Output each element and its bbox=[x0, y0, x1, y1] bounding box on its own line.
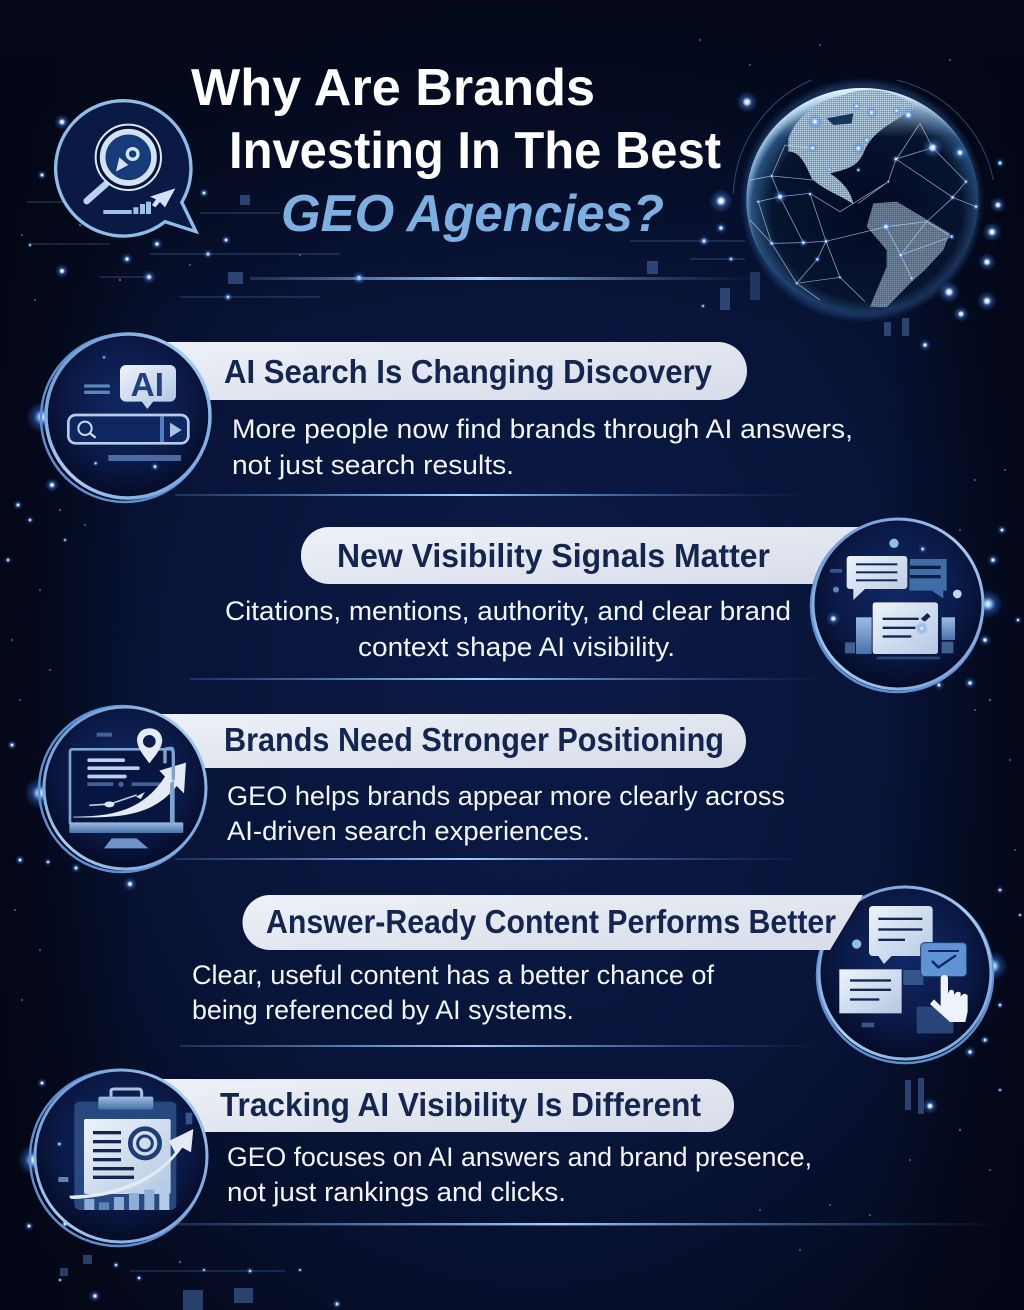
text: body 2: Citations, mentions, authority, and clear brand bbox=[225, 596, 791, 626]
icon: AI search bar: AI bbox=[131, 367, 164, 404]
text: body 1 bbox=[232, 414, 853, 480]
icon: content cards with hand cursor bbox=[817, 887, 1008, 1063]
icon: clipboard report with growth arrow bbox=[17, 1070, 207, 1246]
icon: search speech bubble bbox=[56, 101, 196, 236]
text: body 5: not just rankings and clicks. bbox=[227, 1177, 566, 1207]
panel: brands need stronger positioning bbox=[24, 706, 815, 872]
text: body 5: GEO focuses on AI answers and brand presence, bbox=[227, 1142, 812, 1172]
text: body 4: Clear, useful content has a better chance of bbox=[192, 960, 714, 990]
panel: new visibility signals matter bbox=[190, 519, 1003, 692]
text: body 2: context shape AI visibility. bbox=[358, 632, 675, 662]
text: body 1: More people now find brands through AI answers, bbox=[232, 414, 853, 444]
icon: monitor with pin and growth arrow bbox=[24, 706, 206, 872]
text: body 3: GEO helps brands appear more clearly across bbox=[227, 781, 785, 811]
title: Why Are Brands bbox=[191, 59, 595, 117]
globe bbox=[733, 80, 993, 319]
icon: AI search bar bbox=[26, 334, 210, 502]
text: body 3 bbox=[227, 781, 785, 846]
panel: brands need stronger positioning: Brands Need Stronger Positioning bbox=[224, 721, 724, 758]
panel: tracking AI visibility: Tracking AI Visibility Is Different bbox=[220, 1086, 701, 1123]
heading pill: Answer-Ready Content Performs Better bbox=[266, 903, 836, 940]
title: GEO Agencies? bbox=[281, 185, 664, 243]
title: Investing In The Best bbox=[229, 122, 721, 180]
text: body 1: not just search results. bbox=[232, 450, 514, 480]
text: body 5 bbox=[227, 1142, 812, 1207]
text: body 3: AI-driven search experiences. bbox=[227, 816, 590, 846]
panel: AI search is changing discovery bbox=[26, 334, 853, 502]
heading pill bbox=[242, 895, 863, 950]
title bbox=[191, 59, 721, 243]
text: body 4 bbox=[192, 960, 714, 1025]
text: body 4: being referenced by AI systems. bbox=[192, 995, 574, 1025]
panel: answer-ready content bbox=[180, 887, 1008, 1063]
text: body 2 bbox=[225, 596, 791, 662]
icon: chat bubbles and document bbox=[811, 519, 1003, 692]
panel: AI search is changing discovery: AI Search Is Changing Discovery bbox=[224, 353, 713, 390]
panel: new visibility signals matter: New Visibility Signals Matter bbox=[337, 537, 770, 574]
panel: tracking AI visibility bbox=[17, 1070, 1015, 1246]
